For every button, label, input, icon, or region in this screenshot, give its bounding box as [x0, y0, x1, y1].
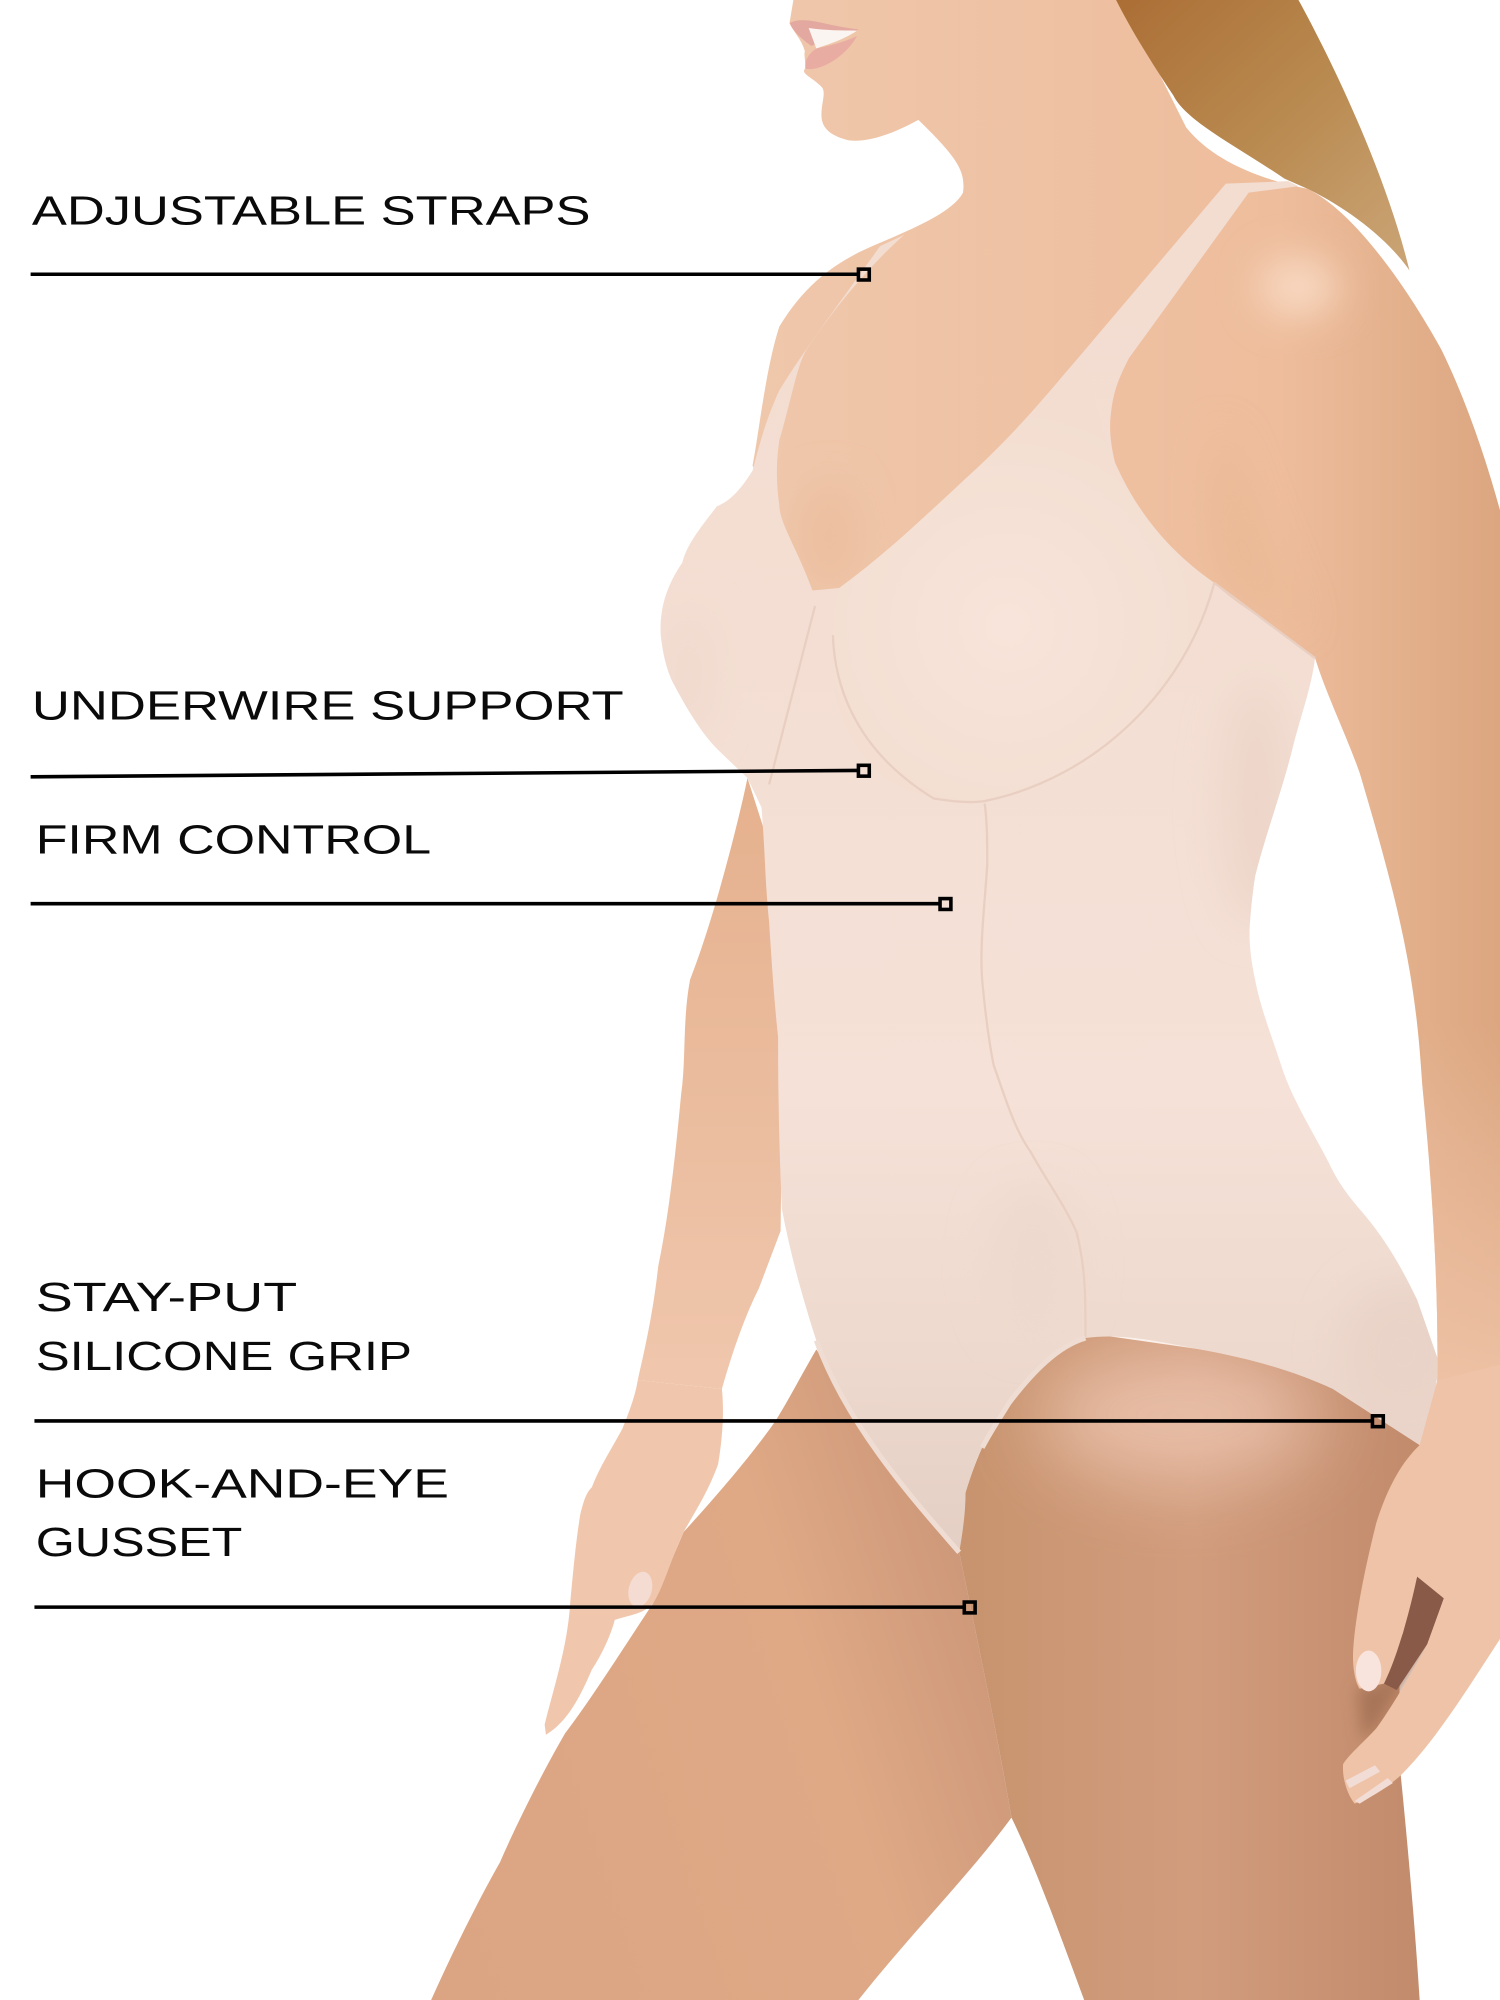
panel shadow — [990, 1186, 1077, 1339]
label: UNDERWIRE SUPPORT — [32, 682, 624, 728]
back waist shadow — [1230, 719, 1290, 907]
far arm — [638, 778, 784, 1389]
forearm lightening toward wrist — [1422, 1020, 1500, 1531]
front thigh — [431, 1349, 1011, 2000]
label line two: GUSSET — [36, 1519, 242, 1565]
shadow behind hand — [1357, 1577, 1444, 1741]
label: FIRM CONTROL — [36, 816, 431, 862]
callout: underwire support — [31, 682, 869, 777]
cleavage shadow — [804, 485, 855, 587]
marker — [940, 899, 951, 909]
leader line — [31, 273, 858, 276]
marker — [1372, 1416, 1383, 1427]
elastic leg trim — [816, 1338, 1085, 1552]
callout: hook-and-eye gusset — [34, 1460, 975, 1613]
thigh highlight — [1040, 1352, 1320, 1480]
bodysuit — [661, 181, 1438, 1552]
callout: stay-put silicone grip — [34, 1274, 1383, 1427]
bodysuit soft shading — [666, 612, 1467, 1422]
lower lip — [805, 36, 857, 69]
finger nails — [1346, 1765, 1393, 1804]
hip shadow — [1367, 1291, 1438, 1412]
bra cup — [833, 364, 1214, 802]
ponytail hair — [1116, 0, 1409, 270]
label line one: STAY-PUT — [36, 1274, 297, 1320]
thumb gap shadow — [1384, 1577, 1444, 1690]
shoulder highlight — [1260, 259, 1337, 315]
figure — [431, 0, 1500, 2000]
face, neck, chest, shoulder and arm — [753, 0, 1500, 1531]
right hand — [1343, 1365, 1500, 1804]
callout: firm control — [31, 816, 951, 909]
label: ADJUSTABLE STRAPS — [32, 187, 591, 233]
marker — [858, 765, 869, 776]
teeth — [809, 28, 857, 48]
thumb nail — [1356, 1651, 1381, 1691]
marker — [858, 269, 869, 280]
leader line — [31, 770, 858, 777]
upper lip — [790, 20, 858, 46]
left hand — [545, 1380, 723, 1735]
label line two: SILICONE GRIP — [36, 1333, 412, 1379]
underarm shadow — [1212, 422, 1306, 634]
left nail — [625, 1569, 656, 1610]
back thigh — [959, 1333, 1420, 2000]
marker — [964, 1602, 975, 1613]
callout: adjustable straps — [31, 187, 869, 280]
leader line — [34, 1606, 964, 1609]
leader line — [31, 902, 940, 905]
leader line — [34, 1420, 1372, 1422]
seams — [769, 583, 1315, 1338]
label line one: HOOK-AND-EYE — [36, 1460, 449, 1506]
bust edge shadow — [675, 686, 686, 706]
